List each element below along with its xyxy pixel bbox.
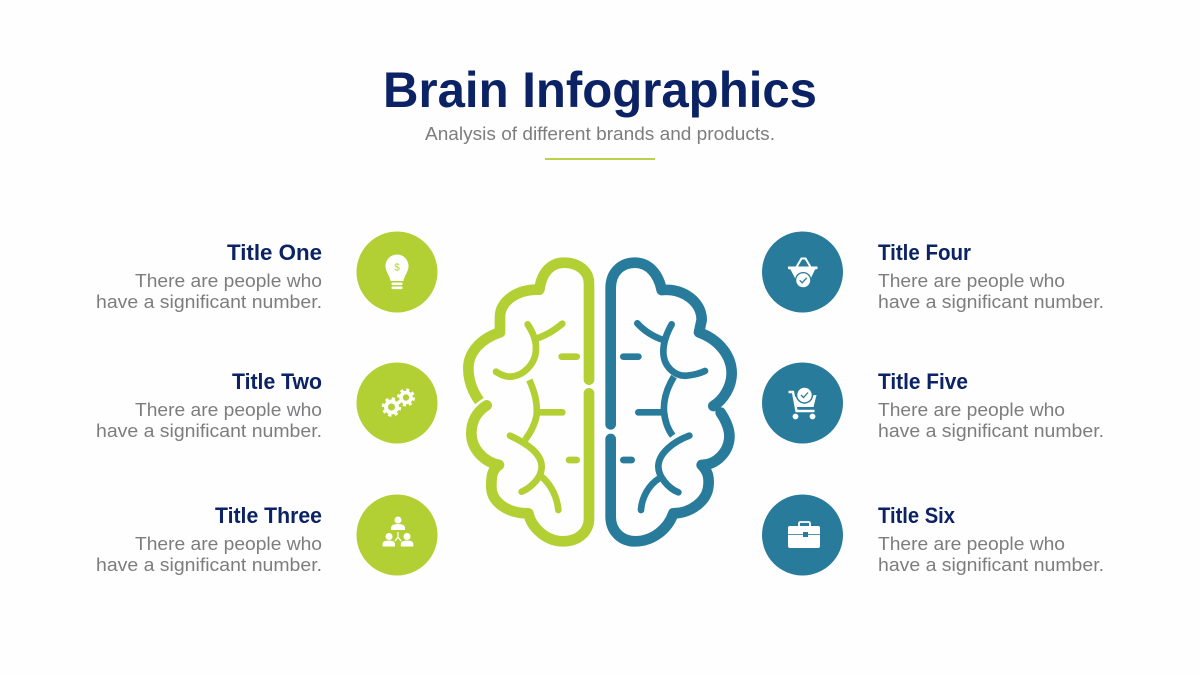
text block: Title Six [878, 503, 1104, 575]
left outer contour [468, 263, 589, 541]
brain: left hemisphere [468, 263, 589, 541]
text block: Title Five: Title Five [878, 369, 968, 394]
icon: basket with check [762, 232, 843, 312]
text block: Title Six: Title Six [878, 503, 956, 528]
text block: Title Five: have a significant number. [878, 420, 1104, 441]
title: Brain Infographics [383, 62, 817, 118]
text block: Title Three: There are people who [135, 533, 322, 554]
text block: Title Five: There are people who [878, 399, 1065, 420]
text block: Title Six: have a significant number. [878, 554, 1104, 575]
text block: Title Two: There are people who [135, 399, 322, 420]
title underline [545, 158, 655, 160]
icon: light bulb with dollar: $ [394, 262, 400, 274]
text block: Title One: Title One [227, 240, 322, 265]
subtitle: Analysis of different brands and products. [425, 123, 775, 144]
text block: Title Two: Title Two [232, 369, 322, 394]
right inner folds [623, 323, 705, 510]
text block: Title One: There are people who [135, 270, 322, 291]
text block: Title Four [878, 240, 1104, 312]
icon: briefcase [762, 494, 843, 576]
icon: shopping cart with check [762, 362, 843, 444]
text block: Title Four: There are people who [878, 270, 1065, 291]
text block: Title Three: have a significant number. [96, 554, 322, 575]
text block: Title One: have a significant number. [96, 291, 322, 312]
text block: Title Three: Title Three [215, 503, 322, 528]
text block: Title One [96, 240, 322, 312]
text block: Title Four: have a significant number. [878, 291, 1104, 312]
left inner folds [496, 324, 577, 510]
text block: Title Two [96, 369, 322, 441]
icon: gears [356, 362, 438, 444]
text block: Title Six: There are people who [878, 533, 1065, 554]
text block: Title Three [96, 503, 322, 575]
brain: right hemisphere [611, 263, 732, 541]
text block: Title Four: Title Four [878, 240, 971, 265]
icon: light bulb with dollar [356, 232, 438, 312]
right outer contour [611, 263, 732, 541]
text block: Title Five [878, 369, 1104, 441]
icon: people hierarchy [356, 494, 438, 576]
text block: Title Two: have a significant number. [96, 420, 322, 441]
